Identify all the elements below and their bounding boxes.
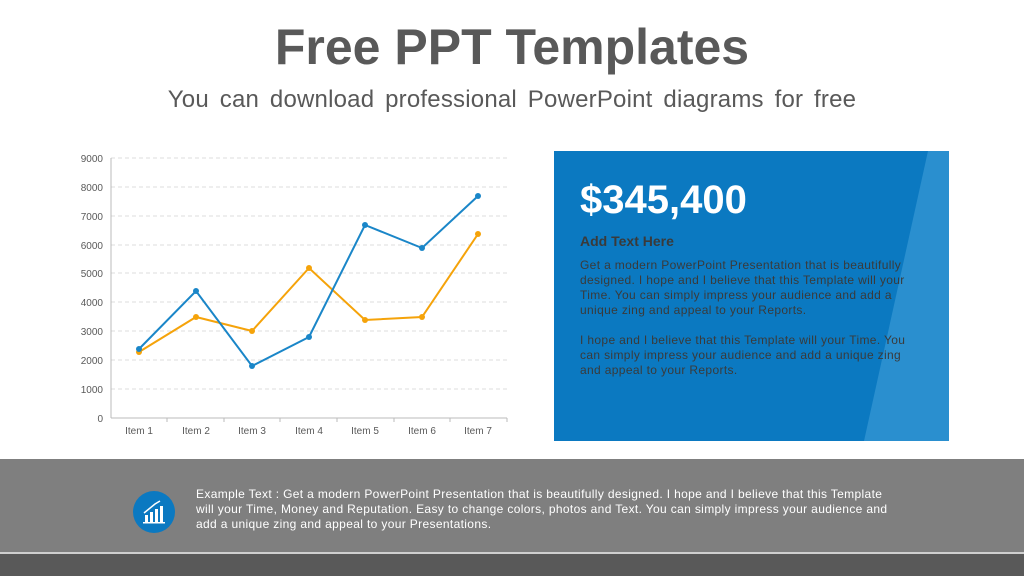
line chart bbox=[80, 154, 508, 437]
line chart: 0 bbox=[97, 414, 103, 425]
line chart: 8000 bbox=[81, 183, 103, 194]
icon: chart bbox=[133, 491, 175, 533]
body text: Get a modern PowerPoint Presentation that is beautifully bbox=[580, 258, 901, 272]
line chart: Item 7 bbox=[464, 426, 492, 437]
body text: designed. I hope and I believe that this Template will your bbox=[580, 273, 905, 287]
footer text bbox=[196, 487, 887, 531]
line chart: Item 1 bbox=[125, 426, 153, 437]
panel: highlight bbox=[554, 151, 949, 441]
heading: Add Text Here bbox=[580, 233, 674, 249]
footer text: Example Text : Get a modern PowerPoint Presentation that is beautifully designed. I hope and I believe that this Template bbox=[196, 487, 882, 501]
line chart: 6000 bbox=[81, 241, 103, 252]
line chart: 9000 bbox=[81, 154, 103, 165]
body text: Time. You can simply impress your audience and add a bbox=[580, 288, 892, 302]
line chart: 7000 bbox=[81, 212, 103, 223]
footer text: will your Time, Money and Reputation. Easy to change colors, photos and Text. You can simply impress your audience and bbox=[196, 502, 887, 516]
body text: unique zing and appeal to your Reports. bbox=[580, 303, 806, 317]
body text: can simply impress your audience and add a unique zing bbox=[580, 348, 901, 362]
title: Free PPT Templates bbox=[275, 19, 749, 75]
line chart: 4000 bbox=[81, 298, 103, 309]
footer text: add a unique zing and appeal to your Presentations. bbox=[196, 517, 491, 531]
line chart: Item 6 bbox=[408, 426, 436, 437]
line chart: 1000 bbox=[81, 385, 103, 396]
body text: I hope and I believe that this Template will your Time. You bbox=[580, 333, 905, 347]
body text: and appeal to your Reports. bbox=[580, 363, 738, 377]
body text bbox=[580, 258, 905, 377]
footer band bbox=[0, 459, 1024, 552]
line chart: Item 2 bbox=[182, 426, 210, 437]
line chart: Item 4 bbox=[295, 426, 323, 437]
line chart: 2000 bbox=[81, 356, 103, 367]
line chart: 3000 bbox=[81, 327, 103, 338]
line chart: Item 5 bbox=[351, 426, 379, 437]
line chart: Item 3 bbox=[238, 426, 266, 437]
subtitle: You can download professional PowerPoint diagrams for free bbox=[168, 86, 856, 113]
big number: $345,400 bbox=[580, 178, 747, 222]
line chart: 5000 bbox=[81, 269, 103, 280]
